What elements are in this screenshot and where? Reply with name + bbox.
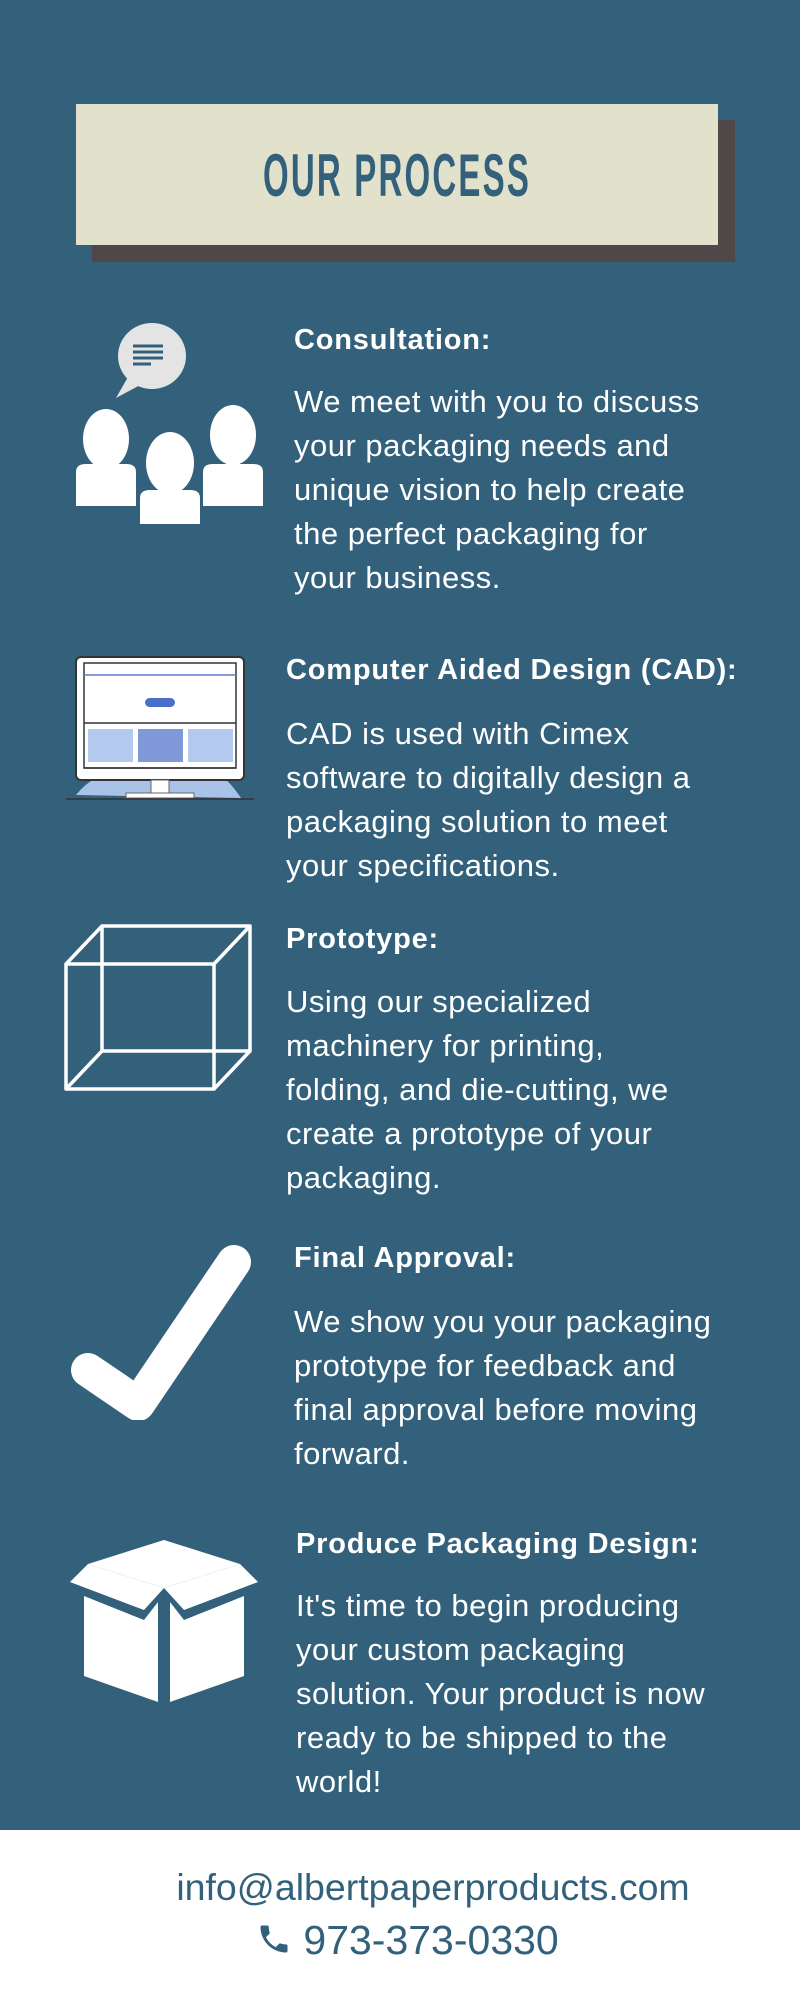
title box	[76, 104, 718, 245]
title shadow	[92, 120, 735, 262]
footer	[0, 1830, 800, 2000]
text: final approval: forward.	[294, 1436, 410, 1471]
text: CAD	[286, 716, 690, 883]
text: consultation: unique vision to help create	[294, 472, 685, 507]
text: CAD: packaging solution to meet	[286, 804, 668, 839]
text: consultation: We meet with you to discuss	[294, 384, 700, 419]
text: produce	[296, 1588, 705, 1799]
text: prototype: packaging.	[286, 1160, 441, 1195]
text: CAD: CAD is used with Cimex	[286, 716, 629, 751]
text: consultation	[294, 384, 700, 595]
text: produce: your custom packaging	[296, 1632, 625, 1667]
heading: consultation: Consultation:	[294, 324, 491, 356]
heading: prototype: Prototype:	[286, 923, 439, 955]
text: consultation: your packaging needs and	[294, 428, 670, 463]
text: final approval	[294, 1304, 711, 1471]
phone: 973-373-0330	[303, 1917, 559, 1963]
text: CAD: your specifications.	[286, 848, 560, 883]
text: prototype: create a prototype of your	[286, 1116, 652, 1151]
heading: produce: Produce Packaging Design:	[296, 1528, 700, 1560]
text: prototype: folding, and die-cutting, we	[286, 1072, 669, 1107]
text: prototype: Using our specialized	[286, 984, 591, 1019]
text: final approval: We show you your packaging	[294, 1304, 711, 1339]
text: CAD: software to digitally design a	[286, 760, 690, 795]
text: produce: solution. Your product is now	[296, 1676, 705, 1711]
text: produce: It's time to begin producing	[296, 1588, 680, 1623]
title: OUR PROCESS	[263, 142, 531, 209]
icon: computer monitor	[66, 656, 254, 800]
text: final approval: final approval before moving	[294, 1392, 697, 1427]
icon: open box	[70, 1540, 258, 1702]
text: final approval: prototype for feedback and	[294, 1348, 676, 1383]
icon: wireframe cube	[64, 924, 252, 1091]
email: info@albertpaperproducts.com	[176, 1866, 690, 1908]
icon: checkmark	[71, 1245, 251, 1420]
text: produce: ready to be shipped to the	[296, 1720, 667, 1755]
text: prototype: machinery for printing,	[286, 1028, 604, 1063]
icon: people with speech bubble	[76, 323, 263, 524]
text: consultation: your business.	[294, 560, 501, 595]
text: produce: world!	[296, 1764, 382, 1799]
heading: final approval: Final Approval:	[294, 1242, 516, 1274]
text: consultation: the perfect packaging for	[294, 516, 648, 551]
heading: CAD: Computer Aided Design (CAD):	[286, 654, 737, 686]
text: prototype	[286, 984, 669, 1195]
